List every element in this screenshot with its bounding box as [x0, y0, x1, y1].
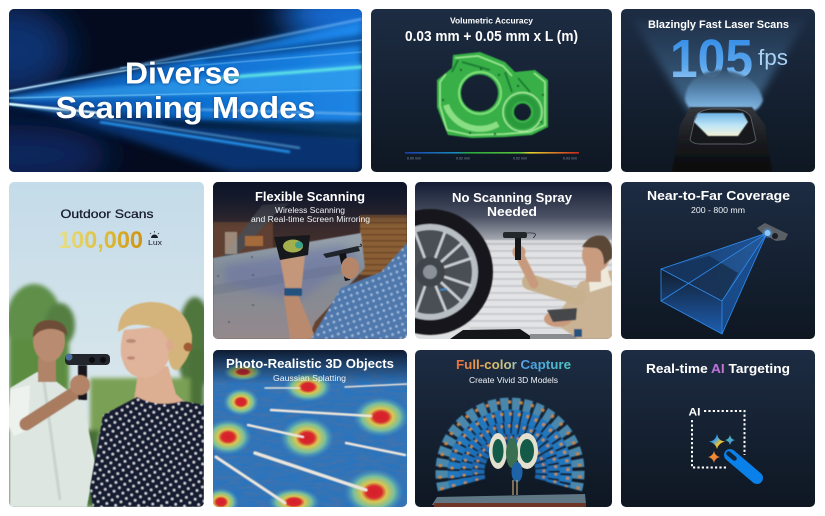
heading: flexible scanning: Flexible Scanning [255, 189, 365, 204]
feather eyes [213, 364, 407, 507]
deviation color scale [405, 152, 579, 160]
heading: diverse scanning modes: Diverse [125, 56, 240, 90]
value: 100,000: 100,000 [58, 227, 143, 254]
woman in polka dot dress [90, 302, 204, 507]
scan volume frustum [661, 233, 767, 334]
window blinds [470, 240, 612, 330]
heading: real-time AI targeting: Real-time AI Targeting [646, 361, 790, 376]
handheld scanner [323, 244, 362, 281]
speed value 105: 105 [670, 29, 753, 89]
top shade [213, 182, 407, 227]
peacock model [432, 402, 586, 507]
peacock pedestal [432, 494, 586, 505]
panel: photo-realistic 3D objects [213, 350, 407, 507]
AI targeting icon: AI [688, 406, 700, 418]
subheading: wireless and mirroring: and Real-time Screen Mirroring [251, 214, 370, 224]
peacock body [506, 438, 518, 468]
handheld scanner [503, 232, 535, 260]
deviation color scale: 0.02 mm [513, 156, 527, 160]
panel: full-color capture [415, 350, 612, 507]
subheading: wireless and mirroring [251, 205, 370, 224]
deviation color scale: 0.00 mm [407, 156, 421, 160]
feather shafts [216, 384, 407, 503]
wooden wall background [213, 203, 407, 275]
heading: no scanning spray needed: No Scanning Spray [452, 190, 573, 205]
phone with live scan [274, 235, 310, 260]
accuracy formula: 0.03 mm + 0.05 mm x L (m) [405, 29, 578, 45]
handheld 3D scanner [65, 354, 110, 365]
panel: flexible scanning [213, 182, 408, 339]
panel: no scanning spray needed [415, 182, 612, 339]
unit: lux with sun icon: Lux [148, 240, 163, 247]
arm holding phone [280, 256, 316, 339]
heading: full-color capture: Full-color Capture [456, 357, 571, 372]
deviation color scale: 0.03 mm [563, 156, 577, 160]
light ray fan [9, 19, 362, 172]
floor platform [450, 329, 535, 339]
AI targeting icon [688, 406, 757, 478]
top shade [213, 350, 407, 384]
panel: laser scan speed [621, 9, 815, 172]
heading: outdoor scans: Outdoor Scans [60, 207, 154, 221]
panel: real-time AI targeting [621, 350, 815, 507]
scanner head glow [685, 70, 763, 112]
unit fps: fps [758, 45, 788, 70]
light beam [632, 20, 806, 112]
subheading: create vivid 3D models: Create Vivid 3D Models [469, 376, 558, 385]
panel: volumetric accuracy [371, 9, 612, 172]
subheading: gaussian splatting: Gaussian Splatting [273, 373, 346, 383]
man holding scanner [9, 320, 95, 507]
heading: diverse scanning modes [56, 56, 316, 125]
panel: outdoor scans [6, 182, 213, 507]
panel: near-to-far coverage [621, 182, 815, 339]
heading: near-to-far coverage: Near-to-Far Coverage [647, 188, 790, 203]
heading: no scanning spray needed [452, 190, 573, 219]
heading: blazingly fast laser scans: Blazingly Fast Laser Scans [648, 19, 789, 31]
heading: no scanning spray needed: Needed [487, 204, 537, 219]
man's patterned shirt [311, 242, 408, 339]
wing panels [489, 433, 507, 469]
heading: photo-realistic 3D objects: Photo-Realistic 3D Objects [226, 356, 394, 371]
scanner window [690, 109, 756, 144]
heading: diverse scanning modes: Scanning Modes [56, 90, 316, 125]
man scanning the wheel [512, 235, 612, 339]
scanner body [672, 107, 772, 172]
subheading: wireless and mirroring: Wireless Scanning [275, 205, 345, 215]
unit: lux with sun icon [148, 231, 163, 247]
scanner device [757, 223, 788, 241]
range 200-800 mm: 200 - 800 mm [691, 205, 745, 215]
car wheel [415, 208, 494, 336]
heading: volumetric accuracy: Volumetric Accuracy [450, 16, 533, 26]
tail fan [440, 402, 580, 490]
blurred trees background [6, 284, 213, 507]
panel: diverse scanning modes hero [9, 9, 362, 172]
car door with markers [213, 233, 365, 339]
green deviation map of gearbox housing [437, 52, 548, 138]
deviation color scale: 0.02 mm [456, 156, 470, 160]
